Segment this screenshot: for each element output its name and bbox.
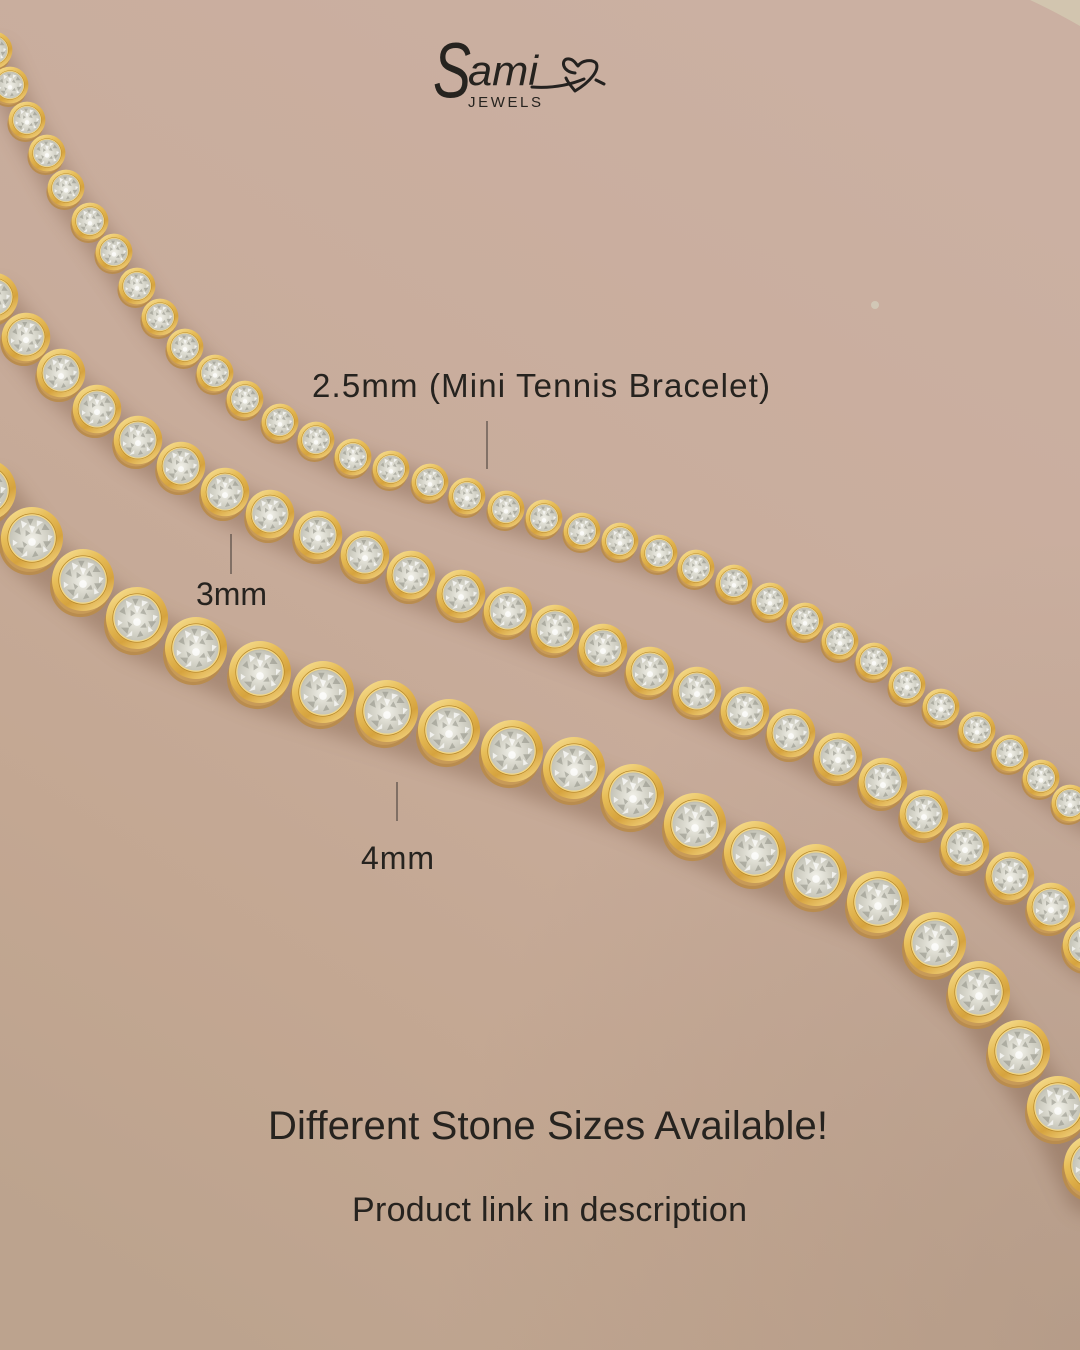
strand: 4mm bracelet — [0, 459, 1080, 1202]
logo: Sami Jewels: S — [433, 26, 471, 114]
logo: Sami Jewels: ami — [468, 47, 540, 94]
headline: Different Stone Sizes Available! — [268, 1104, 828, 1148]
strand: 2.5mm mini tennis bracelet — [0, 32, 1080, 825]
logo: Sami Jewels: JEWELS — [468, 94, 541, 111]
logo: Sami Jewels — [433, 26, 604, 114]
strand: 3mm bracelet — [0, 273, 1080, 974]
label: 4mm: 4mm — [361, 840, 434, 876]
subtext: product link: Product link in description — [352, 1191, 747, 1229]
label: 3mm: 3mm — [196, 576, 267, 612]
label: 4mm — [361, 782, 434, 876]
label: 3mm — [196, 534, 267, 612]
icon: heart with swash — [532, 59, 604, 91]
leader line: 2.5mm — [486, 421, 488, 469]
label: 2.5mm: 2.5mm (Mini Tennis Bracelet) — [312, 367, 770, 404]
